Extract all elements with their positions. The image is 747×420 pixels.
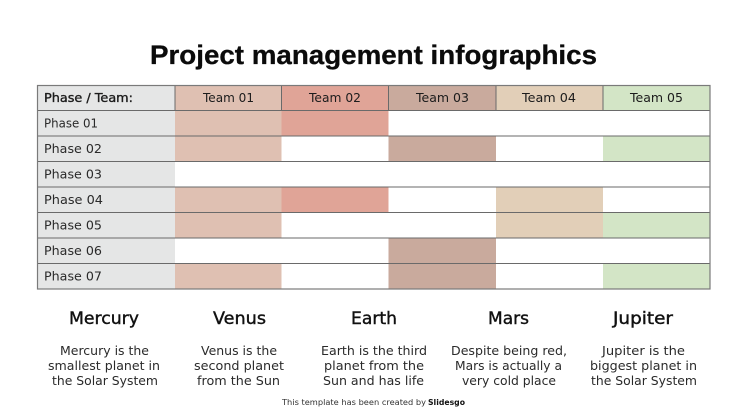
title: Project management infographics — [150, 40, 597, 70]
planet column: Jupiter: the Solar System — [591, 374, 697, 388]
phase row labels — [44, 116, 103, 284]
planet column: Earth — [321, 309, 427, 388]
planet column: Venus: from the Sun — [197, 374, 280, 388]
planet column: Jupiter: Jupiter — [612, 309, 673, 328]
table header labels — [44, 91, 683, 105]
footer credit: This template has been created by — [281, 398, 427, 407]
planet column: Mars: very cold place — [462, 374, 556, 388]
planet column: Earth: Sun and has life — [323, 374, 424, 388]
phase row labels: Phase 03 — [44, 168, 102, 182]
planet column: Venus: Venus is the — [201, 344, 277, 358]
planet column: Mars: Despite being red, — [451, 344, 567, 358]
planet column: Mercury — [48, 309, 160, 388]
phase row labels: Phase 04 — [44, 193, 103, 207]
team 02 column cells — [282, 85, 388, 212]
planet column: Venus: second planet — [194, 359, 284, 373]
planet column: Earth: Earth is the third — [321, 344, 427, 358]
phase row labels: Phase 06 — [44, 244, 102, 258]
planet column: Mercury: the Solar System — [52, 374, 158, 388]
planet column: Mercury: smallest planet in — [48, 359, 160, 373]
phase row labels: Phase 01 — [44, 116, 98, 130]
planet column: Venus: Venus — [213, 309, 266, 328]
planet column: Mars: Mars — [488, 309, 529, 328]
team 04 column cells — [496, 85, 603, 238]
planet column: Mercury: Mercury is the — [60, 344, 149, 358]
planet column: Mars: Mars is actually a — [455, 359, 562, 373]
table header labels: Phase / Team: — [44, 91, 133, 105]
table header labels: Team 03 — [415, 91, 469, 105]
planet column: Earth: Earth — [351, 309, 397, 328]
planet column: Mars — [451, 309, 567, 388]
planet column: Jupiter: biggest planet in — [590, 359, 697, 373]
team 03 column cells — [388, 85, 496, 289]
table: phases by team — [37, 85, 710, 289]
planet column: Jupiter — [590, 309, 697, 388]
phase row labels: Phase 05 — [44, 218, 102, 232]
footer credit: Slidesgo — [428, 398, 465, 407]
table header labels: Team 01 — [202, 91, 254, 105]
planet column: Venus — [194, 309, 284, 388]
planet column: Mercury: Mercury — [69, 309, 139, 328]
table header labels: Team 04 — [521, 91, 576, 105]
planet column: Jupiter: Jupiter is the — [601, 344, 685, 358]
table header labels: Team 02 — [308, 91, 361, 105]
team 05 column cells — [603, 85, 710, 289]
team 01 column cells — [175, 85, 282, 289]
phase column background — [37, 85, 175, 289]
table header labels: Team 05 — [629, 91, 683, 105]
phase row labels: Phase 02 — [44, 142, 102, 156]
phase row labels: Phase 07 — [44, 270, 102, 284]
planet column: Earth: planet from the — [324, 359, 424, 373]
